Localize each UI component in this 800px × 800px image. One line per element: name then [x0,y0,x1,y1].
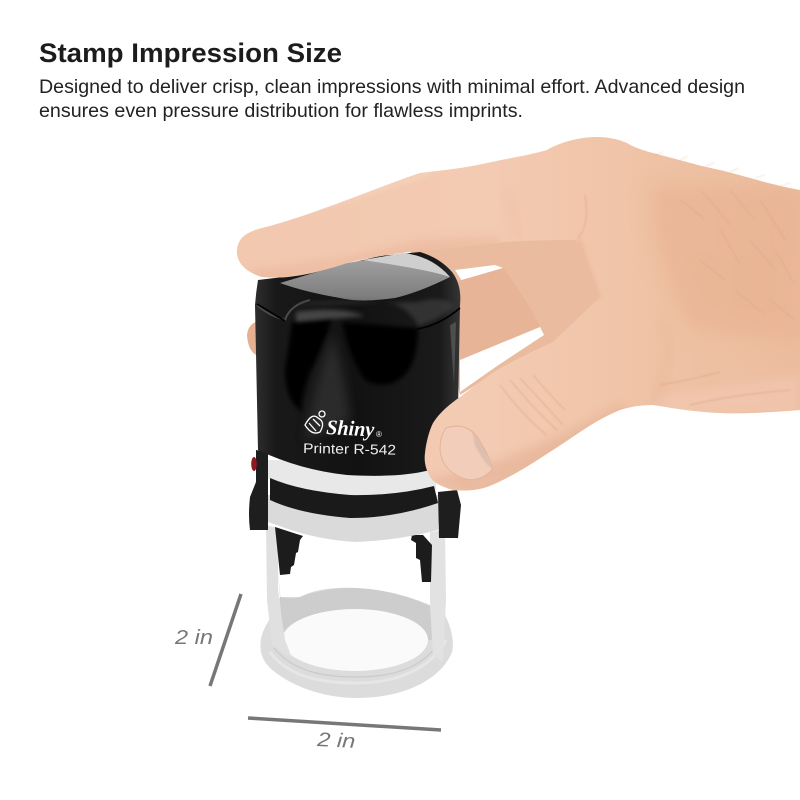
stamp base ring [260,588,453,698]
left latch [249,450,268,530]
white band [268,460,438,497]
stamp body [255,252,460,476]
black teeth of the mechanism [275,527,432,582]
logo emblem [305,411,325,433]
description text: Designed to deliver crisp, clean impressions with minimal effort. Advanced design [39,76,745,98]
model label: Printer R-542 [303,440,396,458]
dimension: width line [248,718,441,730]
description text: ensures even pressure distribution for flawless imprints. [39,100,523,122]
logo wordmark: Shiny [326,415,376,442]
stamp legs [266,525,446,662]
knuckle and crease lines [500,195,790,435]
grey collar [268,495,440,542]
red indicator button [251,457,257,471]
description text [39,76,745,122]
cap rim [257,300,310,320]
thumbnail [440,426,492,480]
right latch [438,490,461,538]
registered mark: ® [376,430,382,439]
black adjustment ring [270,478,438,518]
skin shading [250,172,800,500]
title: Stamp Impression Size [39,38,342,68]
hand: rear fingers [247,235,610,395]
dimension: width label: 2 in [316,729,356,753]
wrist hair [655,152,795,320]
impression opening [282,609,428,671]
cap top surface [280,254,450,300]
dimension: height label: 2 in [174,627,213,649]
dimension: height line [210,594,241,686]
deep gloss patches [285,318,332,412]
hand: index finger, back of hand and thumb [237,137,800,500]
